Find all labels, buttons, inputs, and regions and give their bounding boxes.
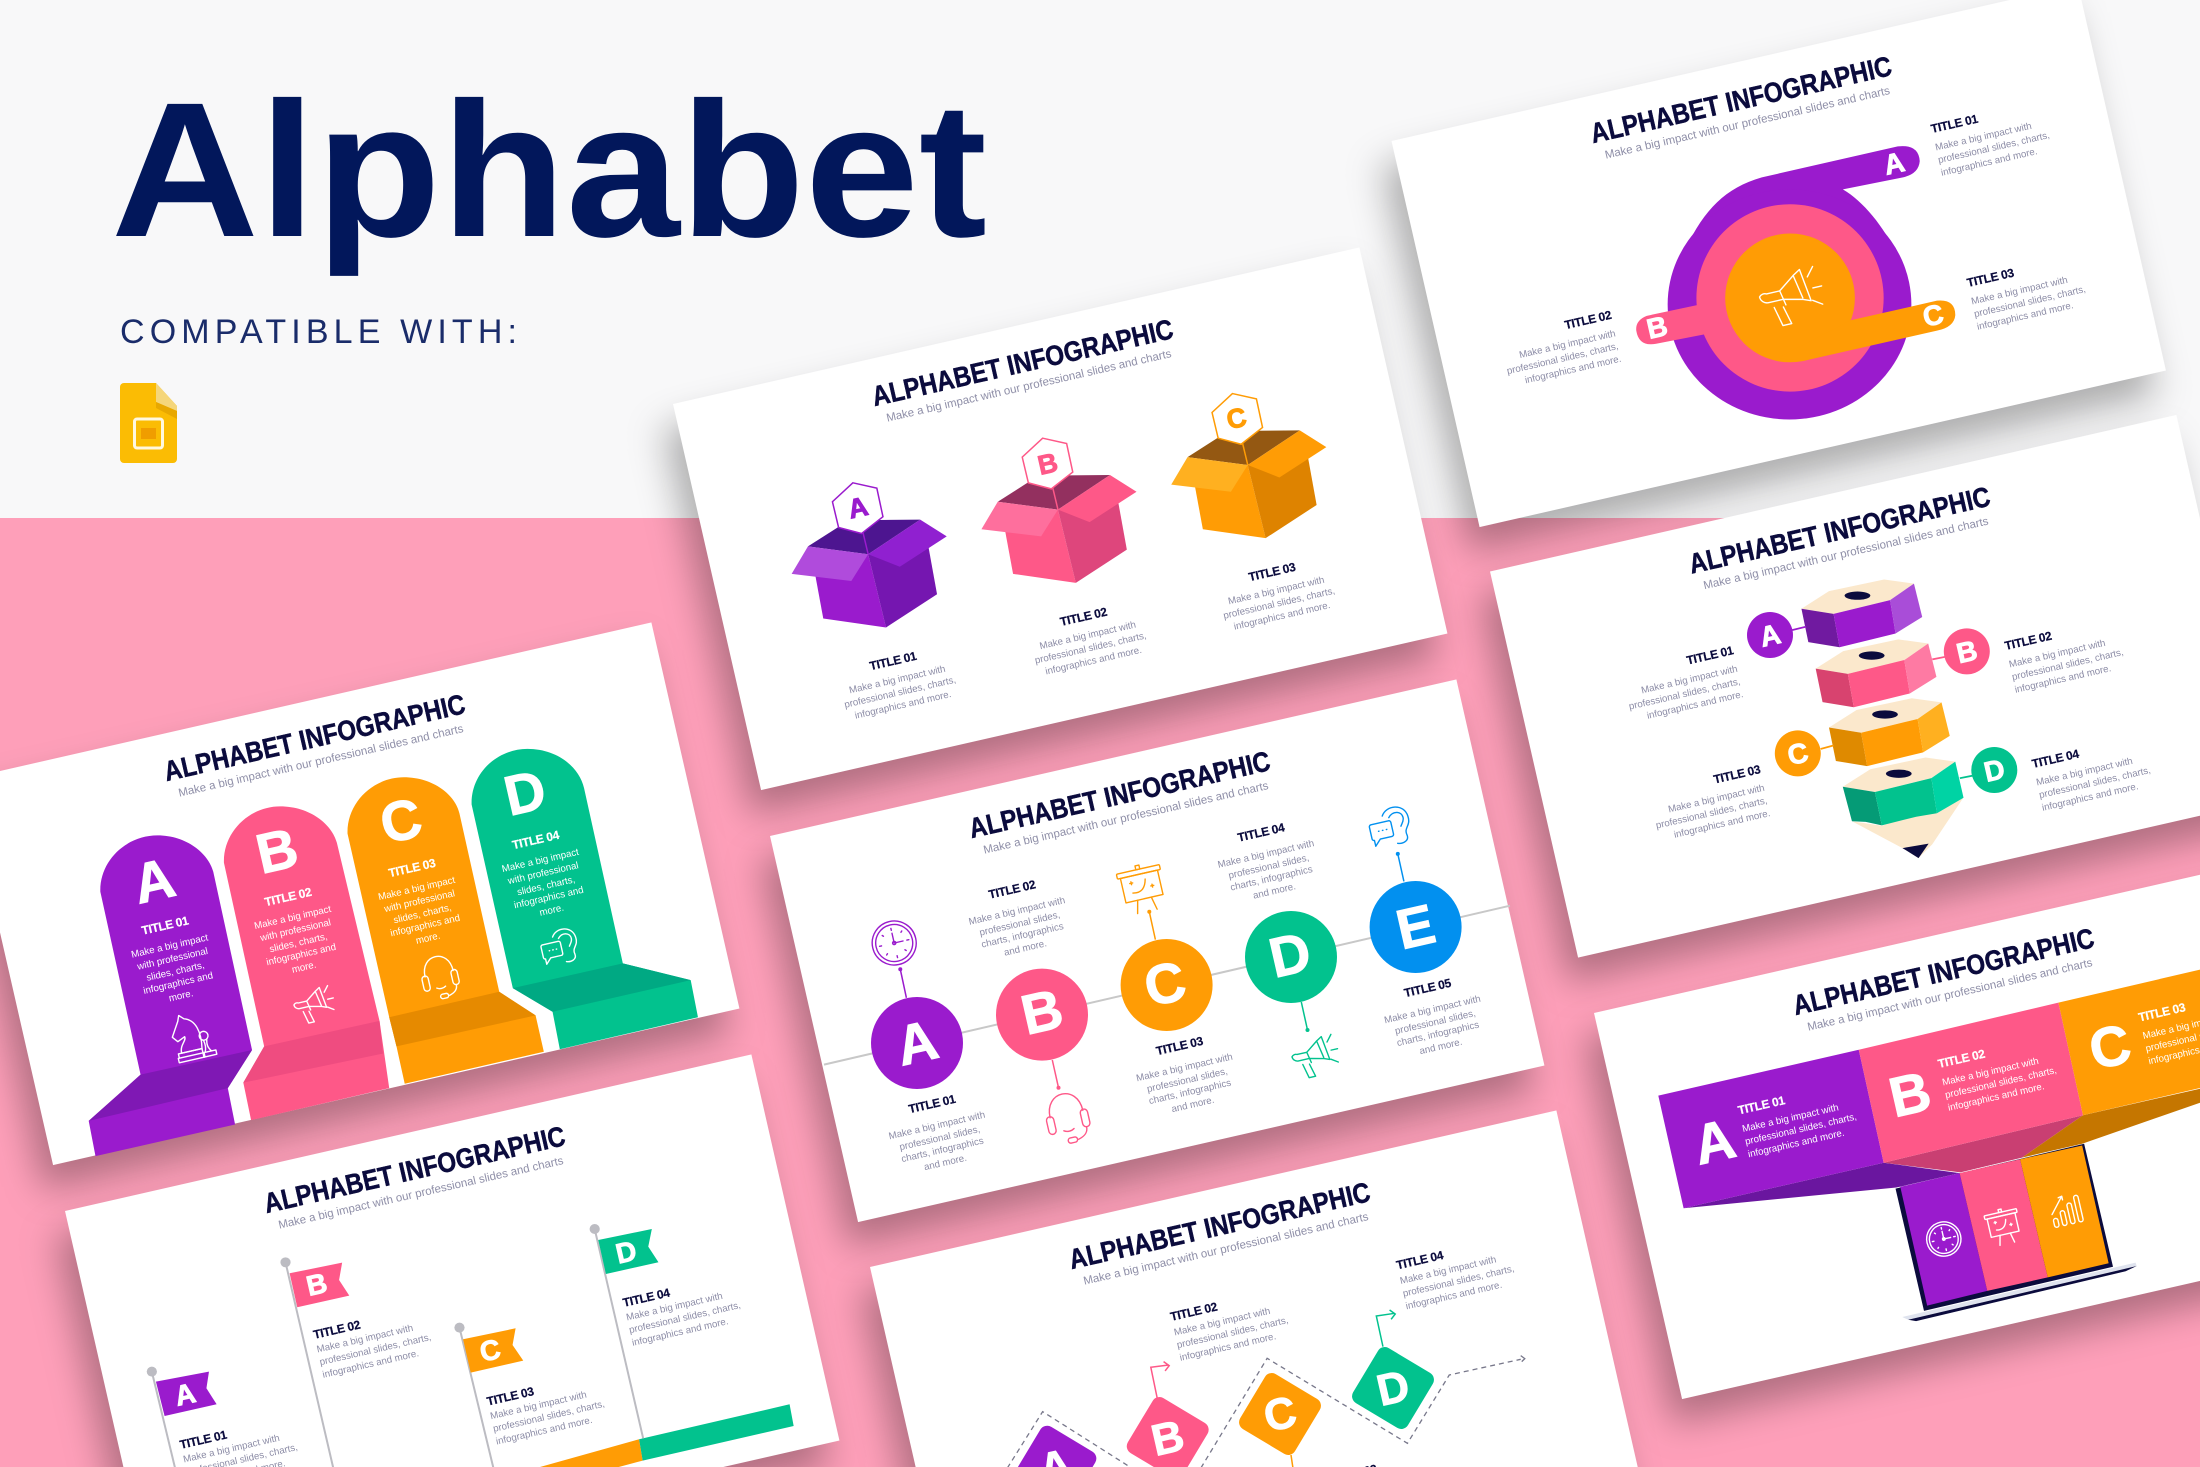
text: title 03: TITLE 03 xyxy=(1966,266,2016,290)
badge D xyxy=(1971,747,2017,793)
text: title 02: Make a big impact with xyxy=(1173,1306,1271,1338)
pencil segment C xyxy=(1829,698,1950,766)
text: title 03: with professional xyxy=(382,888,456,915)
text: title 03: professional slides, xyxy=(1146,1066,1229,1095)
text: title 03: Make a big impact xyxy=(377,875,457,903)
step C xyxy=(1121,910,1213,1031)
text: title 03: more. xyxy=(415,931,441,947)
panel: laptop slide xyxy=(1594,856,2200,1399)
slide card and heading xyxy=(0,622,739,1165)
main heading: Alphabet xyxy=(111,62,987,277)
text: title 02: professional slides, charts, xyxy=(1176,1315,1290,1351)
letter B: B xyxy=(1883,1059,1937,1129)
text: title 02: more. xyxy=(291,960,317,976)
text: title 03: Make a big impact with xyxy=(489,1390,588,1422)
text: title 05: TITLE 05 xyxy=(1403,976,1453,1000)
letter C: C xyxy=(374,785,428,856)
text: title 05: professional slides, xyxy=(1394,1008,1477,1037)
compatibility caption: COMPATIBLE WITH: xyxy=(120,313,517,351)
text: title 01: infographics and more. xyxy=(854,689,952,722)
panel: target circle slide xyxy=(1392,0,2166,527)
badge C: C xyxy=(1785,737,1811,771)
text: title 01: charts, infographics xyxy=(900,1136,985,1165)
text: title 03: professional slides, charts, xyxy=(1655,795,1769,832)
step A xyxy=(871,967,963,1089)
badge A xyxy=(1747,612,1793,658)
text: title 03: TITLE 03 xyxy=(1712,762,1762,787)
slide card and heading xyxy=(770,679,1544,1222)
text: title 04: TITLE 04 xyxy=(1395,1248,1445,1272)
slide card and heading: Make a big impact with our professional slides and charts xyxy=(177,723,465,800)
diamond A xyxy=(1011,1423,1099,1467)
text: title 01: TITLE 01 xyxy=(907,1092,957,1116)
text: title 01: TITLE 01 xyxy=(140,913,190,938)
icon: listening chat xyxy=(1366,804,1414,849)
text: title 03 xyxy=(1215,552,1339,634)
text: title 01: Make a big impact with xyxy=(1934,121,2033,153)
letter A: A xyxy=(1881,146,1907,181)
text: title 03: infographics and more. xyxy=(1673,808,1771,841)
letter D: D xyxy=(498,757,552,828)
slide card and heading xyxy=(870,1110,1644,1467)
step E xyxy=(1370,852,1462,973)
text: title 03: TITLE 03 xyxy=(1155,1034,1205,1058)
text: title 01: Make a big impact with xyxy=(848,664,947,696)
step B xyxy=(996,969,1088,1090)
icon: growth bars xyxy=(2049,1193,2084,1228)
icon: headset xyxy=(418,953,462,1002)
text: title 01: infographics and more. xyxy=(1747,1128,1846,1160)
slide card and heading xyxy=(1392,0,2166,527)
text: title 05: and more. xyxy=(1418,1037,1463,1057)
text: title 02: and more. xyxy=(1003,938,1048,959)
connector: C xyxy=(1291,1455,1294,1467)
text: title 04: professional slides, charts, xyxy=(1402,1264,1516,1300)
text: title 02: professional slides, charts, xyxy=(2011,647,2125,683)
text: title 02: infographics and more. xyxy=(1524,354,1622,386)
text: title 01: Make a big impact with xyxy=(888,1110,986,1142)
text: title 03: professional slides, charts, xyxy=(1973,284,2087,320)
text: title 02: TITLE 02 xyxy=(987,877,1037,902)
text: title 03: infographics and xyxy=(389,913,461,939)
text: title 04: professional slides, xyxy=(1228,853,1310,882)
text: title 02 xyxy=(312,1303,435,1381)
step B: B xyxy=(1015,976,1069,1047)
text: title 02 xyxy=(2003,614,2128,696)
letter C: C xyxy=(2083,1011,2137,1082)
slide card and heading: ALPHABET INFOGRAPHIC xyxy=(1686,481,1993,580)
icon: megaphone xyxy=(1289,1034,1342,1080)
letter C: C xyxy=(1920,298,1946,333)
text: title 01: TITLE 01 xyxy=(1737,1093,1787,1117)
slide card and heading: ALPHABET INFOGRAPHIC xyxy=(1066,1176,1373,1275)
text: title 02: Make a big impact with xyxy=(1941,1056,2040,1088)
text: title 05: Make a big impact with xyxy=(1383,994,1482,1026)
letter B: B xyxy=(303,1267,330,1302)
slide card and heading: ALPHABET INFOGRAPHIC xyxy=(1790,922,2097,1021)
slide card and heading xyxy=(65,1054,839,1467)
text: title 03: and more. xyxy=(1170,1095,1215,1115)
text: title 01: Make a big impact with xyxy=(1640,664,1739,696)
laptop and banner chart xyxy=(1658,956,2200,1321)
text: title 01: professional slides, xyxy=(899,1124,981,1153)
text: title 02: infographics and more. xyxy=(1044,645,1143,677)
icon: megaphone xyxy=(1756,265,1828,329)
diamond C xyxy=(1236,1370,1324,1458)
icon: listening chat xyxy=(538,927,581,967)
banner panels xyxy=(1658,956,2200,1208)
badge C xyxy=(1775,730,1821,776)
arch shapes xyxy=(89,749,698,1156)
badge A: A xyxy=(1757,618,1783,653)
text: title 03 xyxy=(1130,1028,1242,1121)
text: title 02: with professional xyxy=(258,917,332,944)
diamond D: D xyxy=(1372,1361,1414,1416)
text: title 01: professional slides, charts, xyxy=(1937,130,2051,166)
panel: diamonds slide xyxy=(870,1110,1644,1467)
text: title 02: TITLE 02 xyxy=(2003,629,2053,653)
slide card and heading xyxy=(1490,415,2200,958)
slide card and heading: Make a big impact with our professional slides and charts xyxy=(1702,516,1990,592)
text: title 04: professional slides, charts, xyxy=(2038,765,2152,801)
text: title 04: Make a big impact with xyxy=(1399,1254,1497,1287)
slide card and heading: Make a big impact with our professional slides and charts xyxy=(1806,957,2094,1034)
text: title 02: TITLE 02 xyxy=(312,1317,362,1342)
text: title 03: TITLE 03 xyxy=(485,1384,536,1409)
text: title 02: professional slides, charts, xyxy=(319,1332,432,1368)
badge B xyxy=(1944,628,1990,674)
text: title 01: slides, charts, xyxy=(145,960,206,984)
text: title 03: Make a big impact with xyxy=(1667,783,1766,815)
letter A: A xyxy=(1688,1106,1741,1177)
text: title 02: TITLE 02 xyxy=(263,885,313,909)
text: title 01 xyxy=(178,1413,302,1467)
text: title 04: Make a big impact xyxy=(501,847,580,875)
text: title 01: Make a big impact xyxy=(130,932,210,961)
background: pink lower band xyxy=(0,518,2200,1467)
text: title 04 xyxy=(496,824,592,925)
pencil lead xyxy=(1902,844,1929,858)
text: title 01: more. xyxy=(168,988,194,1004)
text: title 02 xyxy=(1026,597,1150,679)
text: title 01: TITLE 01 xyxy=(1685,643,1735,668)
text: title 04 xyxy=(1211,815,1324,908)
text: title 03: TITLE 03 xyxy=(1247,560,1297,584)
text: title 04: infographics and more. xyxy=(2041,781,2140,814)
connectors xyxy=(1792,627,1972,778)
text: title 04: professional slides, charts, xyxy=(628,1300,742,1336)
slide card and heading: ALPHABET INFOGRAPHIC xyxy=(869,313,1176,412)
panel: open boxes slide xyxy=(673,247,1447,790)
text: title 03 xyxy=(2137,985,2200,1067)
step D: D xyxy=(1263,919,1317,990)
text: title 02: TITLE 02 xyxy=(1563,308,1613,332)
text: title 02: infographics and more. xyxy=(322,1348,420,1381)
text: title 01: professional slides, charts, xyxy=(843,675,957,711)
text: title 03: charts, infographics xyxy=(1148,1078,1232,1107)
text: title 04: infographics and xyxy=(513,885,585,911)
concentric circle chart xyxy=(1636,146,1955,419)
text: title 02: infographics and more. xyxy=(2014,663,2112,696)
text: title 04: Make a big impact with xyxy=(625,1291,724,1323)
slide card and heading: Make a big impact with our professional slides and charts xyxy=(1082,1211,1370,1288)
text: title 02 xyxy=(1498,308,1623,390)
banner underside shadows xyxy=(1684,1068,2200,1208)
slide card and heading: ALPHABET INFOGRAPHIC xyxy=(966,745,1273,844)
text: title 01: infographics and more. xyxy=(1940,146,2039,179)
text: title 01: with professional xyxy=(135,946,209,973)
icon: presentation board xyxy=(1115,861,1169,916)
text: title 03: infographics and more. xyxy=(1233,600,1331,633)
text: title 02: charts, infographics xyxy=(980,921,1065,951)
text: title 04: TITLE 04 xyxy=(621,1285,672,1310)
slide card and heading: Make a big impact with our professional slides and charts xyxy=(277,1155,565,1232)
step D xyxy=(1245,911,1337,1032)
text: title 04 xyxy=(2031,732,2155,814)
letter B: B xyxy=(250,815,304,886)
text: title 04: slides, charts, xyxy=(516,874,576,898)
text: title 04: with professional xyxy=(506,860,580,887)
text: title 02: professional slides, charts, xyxy=(1944,1065,2058,1101)
panel: pencil slide xyxy=(1490,415,2200,958)
icon: headset xyxy=(1041,1089,1093,1147)
text: title 04 xyxy=(1395,1233,1518,1312)
diamond B xyxy=(1124,1394,1212,1467)
text: title 03: infographics and more. xyxy=(495,1415,594,1448)
icon: clock xyxy=(1923,1218,1964,1260)
text: title 04: and more. xyxy=(1252,881,1297,902)
panel: flags slide xyxy=(65,1054,839,1467)
text: title 01 xyxy=(125,910,221,1010)
text: title 03: TITLE 03 xyxy=(2137,1000,2187,1024)
text: title 01 xyxy=(836,641,960,723)
text: title 04 xyxy=(621,1271,745,1349)
diamond C: C xyxy=(1259,1387,1301,1442)
letter A: A xyxy=(172,1377,198,1412)
text: title 02: TITLE 02 xyxy=(1937,1047,1987,1071)
icon: chess knight xyxy=(168,1009,217,1063)
slide card and heading: Make a big impact with our professional slides and charts xyxy=(885,348,1173,425)
letter A: A xyxy=(127,845,181,916)
text: title 03: slides, charts, xyxy=(392,902,453,926)
text: title 03: professional slides, charts, xyxy=(1222,586,1336,622)
slide card and heading: ALPHABET INFOGRAPHIC xyxy=(161,688,468,787)
text: title 01: professional slides, charts, xyxy=(1628,676,1742,713)
text: title 02 xyxy=(1937,1032,2061,1114)
text: title 03 xyxy=(1647,762,1772,844)
text: title 01: professional slides, charts, xyxy=(1744,1112,1858,1148)
icon: purple box xyxy=(792,483,947,627)
letter C: C xyxy=(477,1333,503,1368)
text: title 04: infographics and more. xyxy=(631,1316,730,1349)
laptop screen xyxy=(1896,1144,2113,1311)
text: title 03: Make a big impact with xyxy=(1227,575,1326,607)
text: title 02: Make a big impact with xyxy=(968,895,1066,928)
badge B: B xyxy=(1954,635,1980,669)
text: title 01: Make a big impact with xyxy=(182,1433,281,1465)
icon: megaphone xyxy=(291,985,337,1025)
text: title 01: TITLE 01 xyxy=(868,649,918,673)
icon: presentation board xyxy=(1983,1206,2023,1247)
laptop base xyxy=(1902,1263,2137,1321)
slide card and heading xyxy=(673,247,1447,790)
text: title 02 xyxy=(1169,1285,1292,1364)
connector and arrow: D xyxy=(1376,1313,1395,1347)
icon: clock xyxy=(868,917,921,969)
step E: E xyxy=(1390,892,1441,961)
panel: timeline slide xyxy=(770,679,1544,1222)
slide card and heading: ALPHABET INFOGRAPHIC xyxy=(1587,50,1895,149)
text: title 01: Make a big impact with xyxy=(1741,1102,1840,1135)
text: title 02: TITLE 02 xyxy=(1059,605,1109,629)
pencil segment D xyxy=(1843,758,1964,825)
diamond B: B xyxy=(1147,1411,1189,1466)
text: title 02: TITLE 02 xyxy=(1169,1299,1219,1324)
text: title 02: professional slides, xyxy=(979,910,1061,939)
pencil chart xyxy=(1792,579,1972,858)
text: title 02: professional slides, charts, xyxy=(1034,630,1148,667)
pencil segment B xyxy=(1816,639,1936,707)
slide card and heading: Make a big impact with our professional slides and charts xyxy=(982,780,1270,857)
text: title 03: professional slides, charts, xyxy=(492,1399,606,1435)
text: title 05 xyxy=(1378,970,1490,1063)
arrow head: D xyxy=(1390,1310,1395,1319)
text: title 01: TITLE 01 xyxy=(1930,112,1980,136)
text: title 04: charts, infographics xyxy=(1229,864,1314,894)
pencil tip xyxy=(1852,798,1963,858)
text: title 05: charts, infographics xyxy=(1396,1020,1480,1049)
letter D: D xyxy=(613,1235,639,1270)
text: title 02: infographics and more. xyxy=(1179,1331,1277,1364)
flags and poles xyxy=(147,1224,794,1467)
text: title 02 xyxy=(962,872,1075,965)
letter B: B xyxy=(1035,447,1061,481)
text: title 04: TITLE 04 xyxy=(511,828,561,852)
text: title 01 xyxy=(1620,643,1745,725)
text: title 02: infographics and more. xyxy=(1947,1081,2046,1114)
text: title 02 xyxy=(248,881,344,982)
text: title 03: Make a big impact with xyxy=(1135,1052,1234,1084)
icon: orange box xyxy=(1171,394,1326,538)
text: title 04: TITLE 04 xyxy=(2031,747,2081,771)
text: title 01: TITLE 01 xyxy=(178,1427,229,1452)
icon: Google Slides file xyxy=(120,383,177,463)
slide card and heading xyxy=(1594,856,2200,1399)
pencil segment A xyxy=(1801,579,1922,647)
text: title 02: professional slides, charts, xyxy=(1506,341,1620,377)
text: title 03 xyxy=(372,852,468,953)
arrow head: B xyxy=(1164,1362,1169,1371)
text: title 03: infographics and more. xyxy=(1976,300,2075,333)
text: title 01: infographics and more. xyxy=(1646,689,1744,722)
text: title 03 xyxy=(1966,251,2090,333)
text: title 04: Make a big impact with xyxy=(2035,756,2134,788)
text: title 04: Make a big impact with xyxy=(1217,838,1315,871)
step C: C xyxy=(1138,948,1192,1019)
text: title 02: Make a big impact with xyxy=(1039,619,1137,652)
text: title 04: infographics and more. xyxy=(1405,1280,1503,1312)
text: title 01 xyxy=(882,1086,995,1179)
text: title 02: Make a big impact with xyxy=(1518,328,1617,361)
text: title 02: Make a big impact with xyxy=(2008,638,2107,670)
text: title 02: infographics and xyxy=(265,942,337,968)
text: title 03: TITLE 03 xyxy=(387,856,437,880)
text: title 01 xyxy=(1737,1078,1861,1160)
text: title 02: slides, charts, xyxy=(268,931,329,955)
slide card and heading: Make a big impact with our professional slides and charts xyxy=(1604,85,1891,162)
text: title 02: Make a big impact xyxy=(253,904,333,932)
letter C: C xyxy=(1224,402,1249,435)
dashed zigzag path xyxy=(998,1356,1525,1467)
panel: arches slide xyxy=(0,622,739,1165)
text: title 02: Make a big impact with xyxy=(316,1323,414,1355)
slide card and heading: ALPHABET INFOGRAPHIC xyxy=(261,1120,568,1219)
text: title 03: Make a big impact with xyxy=(1970,275,2069,307)
text: title 03 xyxy=(485,1369,609,1448)
text: title 04: more. xyxy=(538,903,565,919)
background: light top band xyxy=(0,0,2200,518)
step A: A xyxy=(890,1007,944,1078)
text: title 01 xyxy=(1930,97,2054,179)
text: title 04: TITLE 04 xyxy=(1236,820,1286,845)
text: title 01: infographics and xyxy=(142,970,214,997)
text: title 01: and more. xyxy=(923,1153,968,1173)
letter A: A xyxy=(845,491,871,525)
diamond D xyxy=(1349,1344,1437,1432)
icon: pink box xyxy=(981,438,1137,583)
connector and arrow: B xyxy=(1151,1365,1169,1399)
letter B: B xyxy=(1644,310,1670,345)
badge D: D xyxy=(1981,753,2008,788)
